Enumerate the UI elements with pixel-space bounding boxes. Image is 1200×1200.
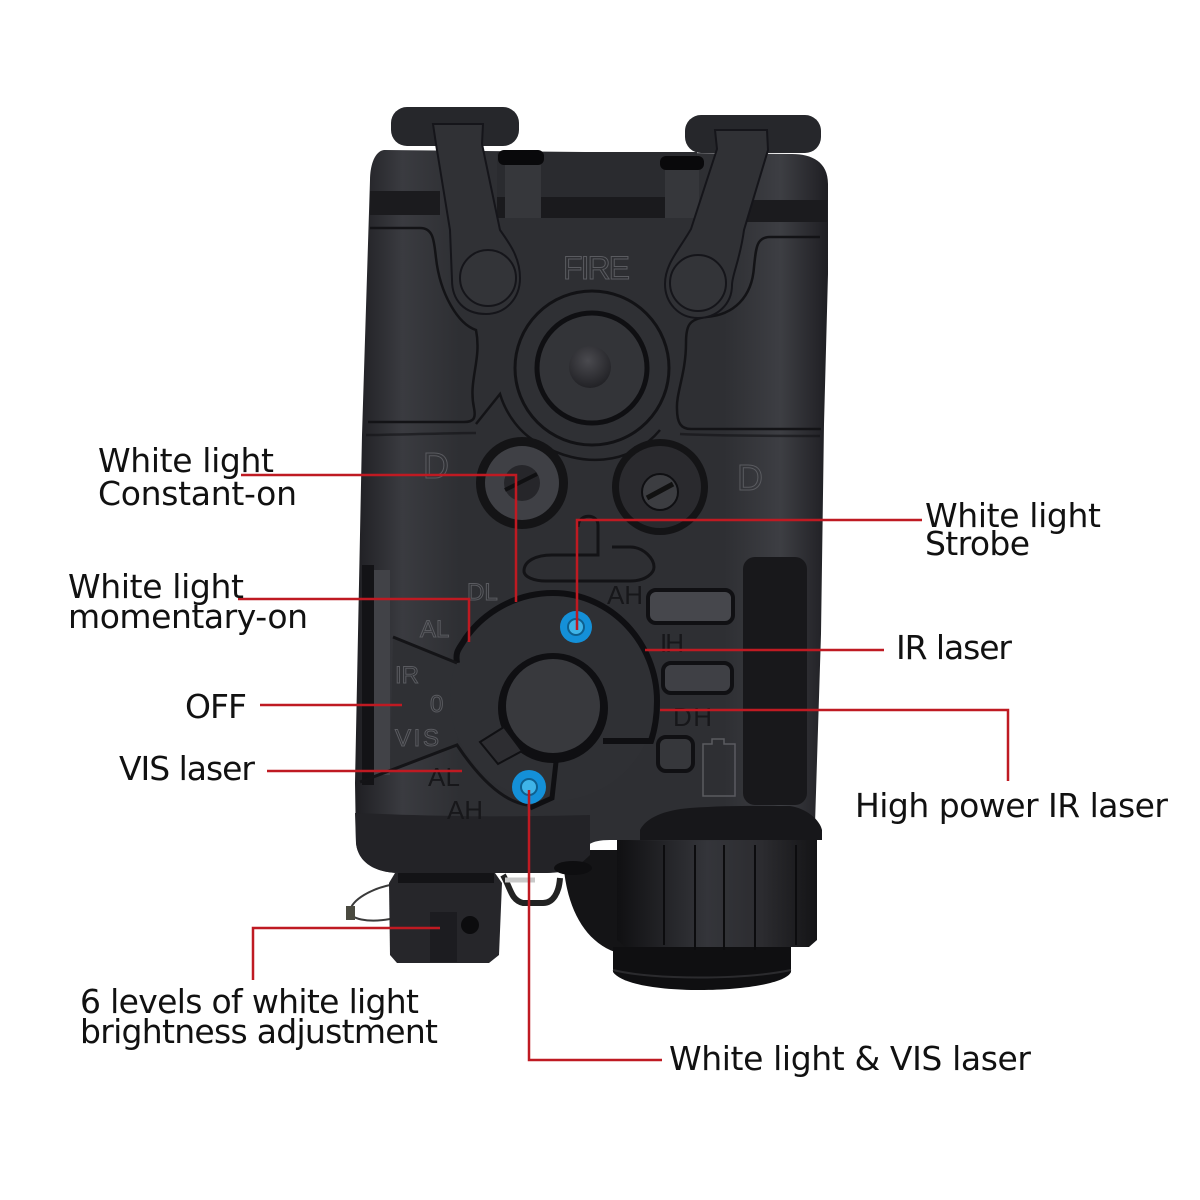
engraved labels: D (423, 445, 449, 486)
side panels (355, 557, 807, 873)
label: white light constant-on (98, 441, 297, 513)
label: white light and vis laser: White light & VIS laser (669, 1039, 1031, 1078)
label: white light strobe (925, 496, 1101, 563)
fire button (515, 291, 669, 445)
right adjuster screw (612, 439, 708, 535)
label: white light momentary-on: White light (68, 567, 244, 606)
selector dial (360, 593, 657, 808)
label: off: OFF (185, 687, 247, 726)
engraved labels: AH (607, 580, 643, 610)
top left cap and strap (391, 107, 520, 314)
slide windows (648, 590, 733, 771)
top rail (370, 150, 827, 222)
engraved labels: IR (395, 662, 419, 689)
label: brightness adjustment (80, 982, 438, 1051)
engraved labels: D (737, 457, 763, 498)
engraved labels: VIS (395, 725, 439, 752)
side connector cap (563, 836, 817, 990)
blue screw: top (560, 611, 592, 643)
device: laser unit (346, 107, 828, 990)
blue screw: bottom (512, 770, 546, 804)
mounting screw (554, 861, 592, 875)
label: vis laser: VIS laser (119, 749, 255, 788)
left adjuster screw (476, 437, 568, 529)
engraved labels: AL (428, 762, 460, 792)
label: high power ir laser: High power IR laser (855, 786, 1168, 825)
label: white light strobe: White light (925, 496, 1101, 535)
label: brightness adjustment: brightness adjustment (80, 1012, 438, 1051)
callout lines (238, 475, 1008, 1060)
label: white light constant-on: Constant-on (98, 474, 297, 513)
engraved labels: DH (673, 702, 712, 732)
center slot below screws (524, 516, 654, 581)
battery icon (703, 739, 735, 796)
label: ir laser: IR laser (896, 628, 1012, 667)
engraved labels: IH (660, 628, 684, 658)
engraved labels: AH (447, 795, 483, 825)
engraved labels: DL (467, 579, 498, 606)
connector dome (640, 806, 822, 840)
rear knob and cable loop (346, 873, 560, 963)
engraved labels: 0 (430, 691, 443, 718)
engraved labels: FIRE (563, 250, 630, 286)
label: white light constant-on: White light (98, 441, 274, 480)
label: white light strobe: Strobe (925, 524, 1030, 563)
top right cap and strap (665, 115, 821, 318)
label: brightness adjustment: 6 levels of white light (80, 982, 419, 1021)
engraved labels (395, 250, 763, 825)
label: white light momentary-on: momentary-on (68, 597, 308, 636)
engraved labels: AL (420, 616, 449, 643)
main housing (355, 150, 828, 873)
raised face outlines (366, 228, 821, 460)
label: white light momentary-on (68, 567, 308, 636)
